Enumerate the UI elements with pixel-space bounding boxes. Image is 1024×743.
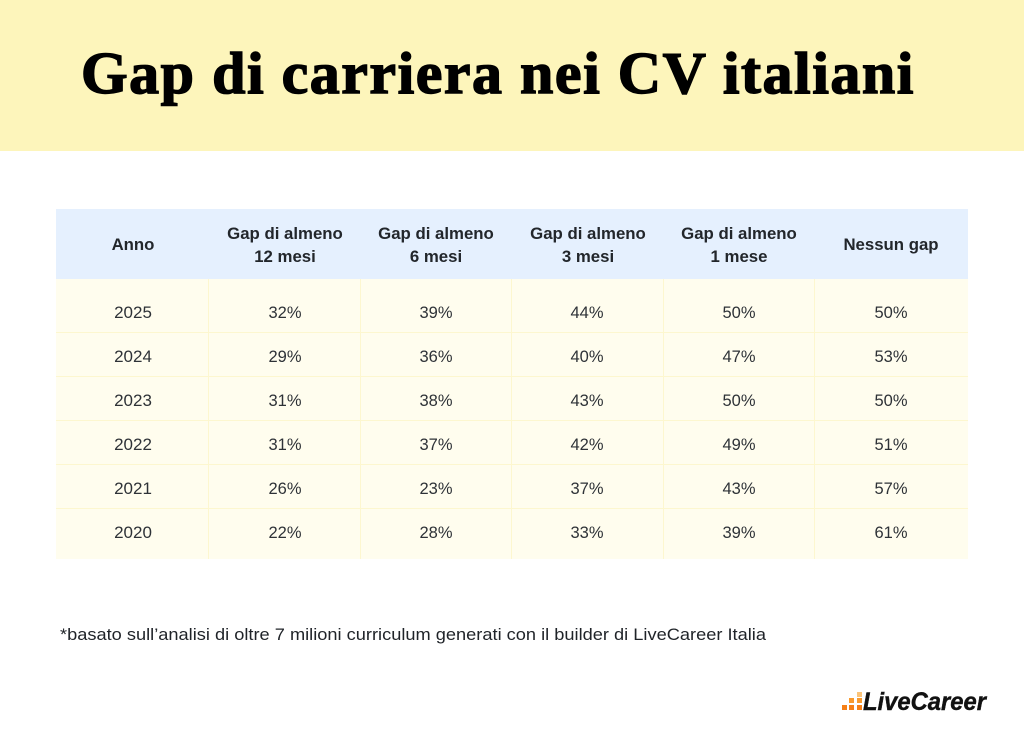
row 2022: 2022: [114, 435, 152, 454]
data table: [56, 209, 968, 559]
table header: Nessun gap: [843, 235, 939, 254]
row 2021: 37%: [570, 480, 604, 498]
row 2022: 42%: [570, 436, 604, 454]
row 2020: 22%: [268, 524, 302, 542]
row 2023: 43%: [570, 392, 604, 410]
row 2021: 2021: [114, 479, 152, 498]
title banner: [0, 0, 1024, 151]
row 2022: 37%: [419, 436, 453, 454]
table header: Gap di almeno: [530, 224, 646, 243]
row 2021: [114, 479, 908, 498]
row 2021: 43%: [722, 480, 756, 498]
table body: [56, 279, 968, 559]
row 2020: 28%: [419, 524, 453, 542]
row 2024: 2024: [114, 347, 152, 366]
row 2022: 49%: [722, 436, 756, 454]
row 2020: 2020: [114, 523, 152, 542]
row 2025: 32%: [268, 304, 302, 322]
table header: Anno: [112, 235, 154, 254]
row 2023: 38%: [419, 392, 453, 410]
row 2023: 31%: [268, 392, 302, 410]
icon: orange squares: [842, 692, 862, 710]
table header: 3 mesi: [562, 247, 614, 266]
row 2025: [114, 303, 908, 322]
row 2024: 40%: [570, 348, 604, 366]
row 2024: 36%: [419, 348, 453, 366]
row 2025: 2025: [114, 303, 152, 322]
row 2024: 29%: [268, 348, 302, 366]
table header: Gap di almeno: [227, 224, 343, 243]
row 2025: 50%: [874, 304, 908, 322]
row 2020: 61%: [874, 524, 908, 542]
row 2023: 2023: [114, 391, 152, 410]
row 2024: 47%: [722, 348, 756, 366]
row 2020: [114, 523, 908, 542]
row 2020: 39%: [722, 524, 756, 542]
row 2022: [114, 435, 908, 454]
row 2023: 50%: [722, 392, 756, 410]
row 2023: [114, 391, 908, 410]
row 2024: [114, 347, 908, 366]
table header: Gap di almeno: [378, 224, 494, 243]
table header: 12 mesi: [254, 247, 316, 266]
table header: [56, 209, 968, 279]
row 2021: 26%: [268, 480, 302, 498]
row 2022: 31%: [268, 436, 302, 454]
row 2021: 57%: [874, 480, 908, 498]
row 2024: 53%: [874, 348, 908, 366]
row 2022: 51%: [874, 436, 908, 454]
title: Gap di carriera nei CV italiani: [81, 40, 915, 106]
row 2025: 39%: [419, 304, 453, 322]
row 2021: 23%: [419, 480, 453, 498]
logo: LiveCareer: LiveCareer: [863, 688, 987, 716]
row 2020: 33%: [570, 524, 604, 542]
row 2025: 44%: [570, 304, 604, 322]
table header: Gap di almeno: [681, 224, 797, 243]
row 2023: 50%: [874, 392, 908, 410]
table header: 1 mese: [711, 247, 767, 266]
table header: 6 mesi: [410, 247, 462, 266]
row 2025: 50%: [722, 304, 756, 322]
footnote: *basato sull’analisi di oltre 7 milioni curriculum generati con il builder di LiveCareer Italia: [60, 626, 767, 644]
